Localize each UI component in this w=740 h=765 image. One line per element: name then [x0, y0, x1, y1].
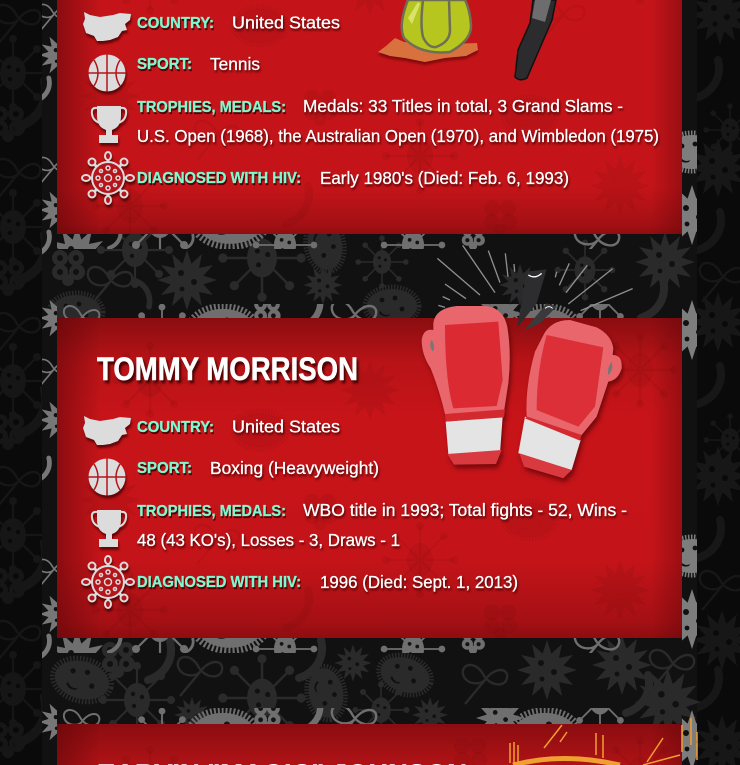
- icon: tennis ball on clay: [378, 0, 478, 62]
- text: Tommy Morrison facts: Boxing (Heavyweight): [210, 458, 379, 478]
- icon: impact burst above gloves: [437, 245, 633, 331]
- text: Arthur Ashe facts: Tennis: [210, 54, 260, 74]
- row icons: Arthur Ashe: [82, 12, 134, 204]
- text: Arthur Ashe facts: [137, 12, 659, 188]
- left light strip microbes: [42, 4, 57, 740]
- text: Arthur Ashe facts: DIAGNOSED WITH HIV:: [137, 170, 301, 187]
- text: Tommy Morrison facts: COUNTRY:: [137, 419, 214, 436]
- icon: tennis racket handle: [515, 0, 556, 80]
- text: Tommy Morrison facts: WBO title in 1993; Total fights - 52, Wins -: [303, 500, 627, 520]
- dark microbes in lower gap: [48, 635, 701, 742]
- panel: Tommy Morrison card: [57, 318, 682, 638]
- text: Tommy Morrison facts: 1996 (Died: Sept. 1, 2013): [320, 572, 518, 592]
- text: Arthur Ashe facts: Early 1980's (Died: Feb. 6, 1993): [320, 168, 569, 188]
- text: Arthur Ashe facts: Medals: 33 Titles in total, 3 Grand Slams -: [303, 96, 623, 116]
- text: Tommy Morrison facts: SPORT:: [137, 460, 192, 477]
- dark microbes in upper gap: [49, 212, 695, 331]
- light microbes along upper and lower gap edges: [47, 183, 632, 765]
- icon: orange basketball sketch: [510, 718, 697, 765]
- text: Arthur Ashe facts: SPORT:: [137, 56, 192, 73]
- title: Tommy Morrison: TOMMY MORRISON: [97, 351, 358, 387]
- text: Arthur Ashe facts: U.S. Open (1968), the Australian Open (1970), and Wimbledon (1975): [137, 126, 659, 146]
- row icons: Tommy Morrison: [82, 416, 134, 608]
- text: Tommy Morrison facts: 48 (43 KO's), Losses - 3, Draws - 1: [137, 530, 400, 550]
- text: Tommy Morrison facts: United States: [232, 416, 340, 436]
- text: Arthur Ashe facts: TROPHIES, MEDALS:: [137, 99, 286, 116]
- text: Tommy Morrison facts: [137, 416, 627, 592]
- text: Arthur Ashe facts: COUNTRY:: [137, 15, 214, 32]
- panel: Magic Johnson card: [57, 724, 682, 765]
- text: Tommy Morrison facts: DIAGNOSED WITH HIV:: [137, 574, 301, 591]
- text: Arthur Ashe facts: United States: [232, 12, 340, 32]
- icon: boxing gloves: [422, 306, 622, 478]
- right light strip microbes: [682, 130, 697, 765]
- left column pattern: [0, 4, 42, 758]
- text: Tommy Morrison facts: TROPHIES, MEDALS:: [137, 503, 286, 520]
- panel: Arthur Ashe card: [57, 0, 682, 234]
- right column pattern: [697, 0, 740, 765]
